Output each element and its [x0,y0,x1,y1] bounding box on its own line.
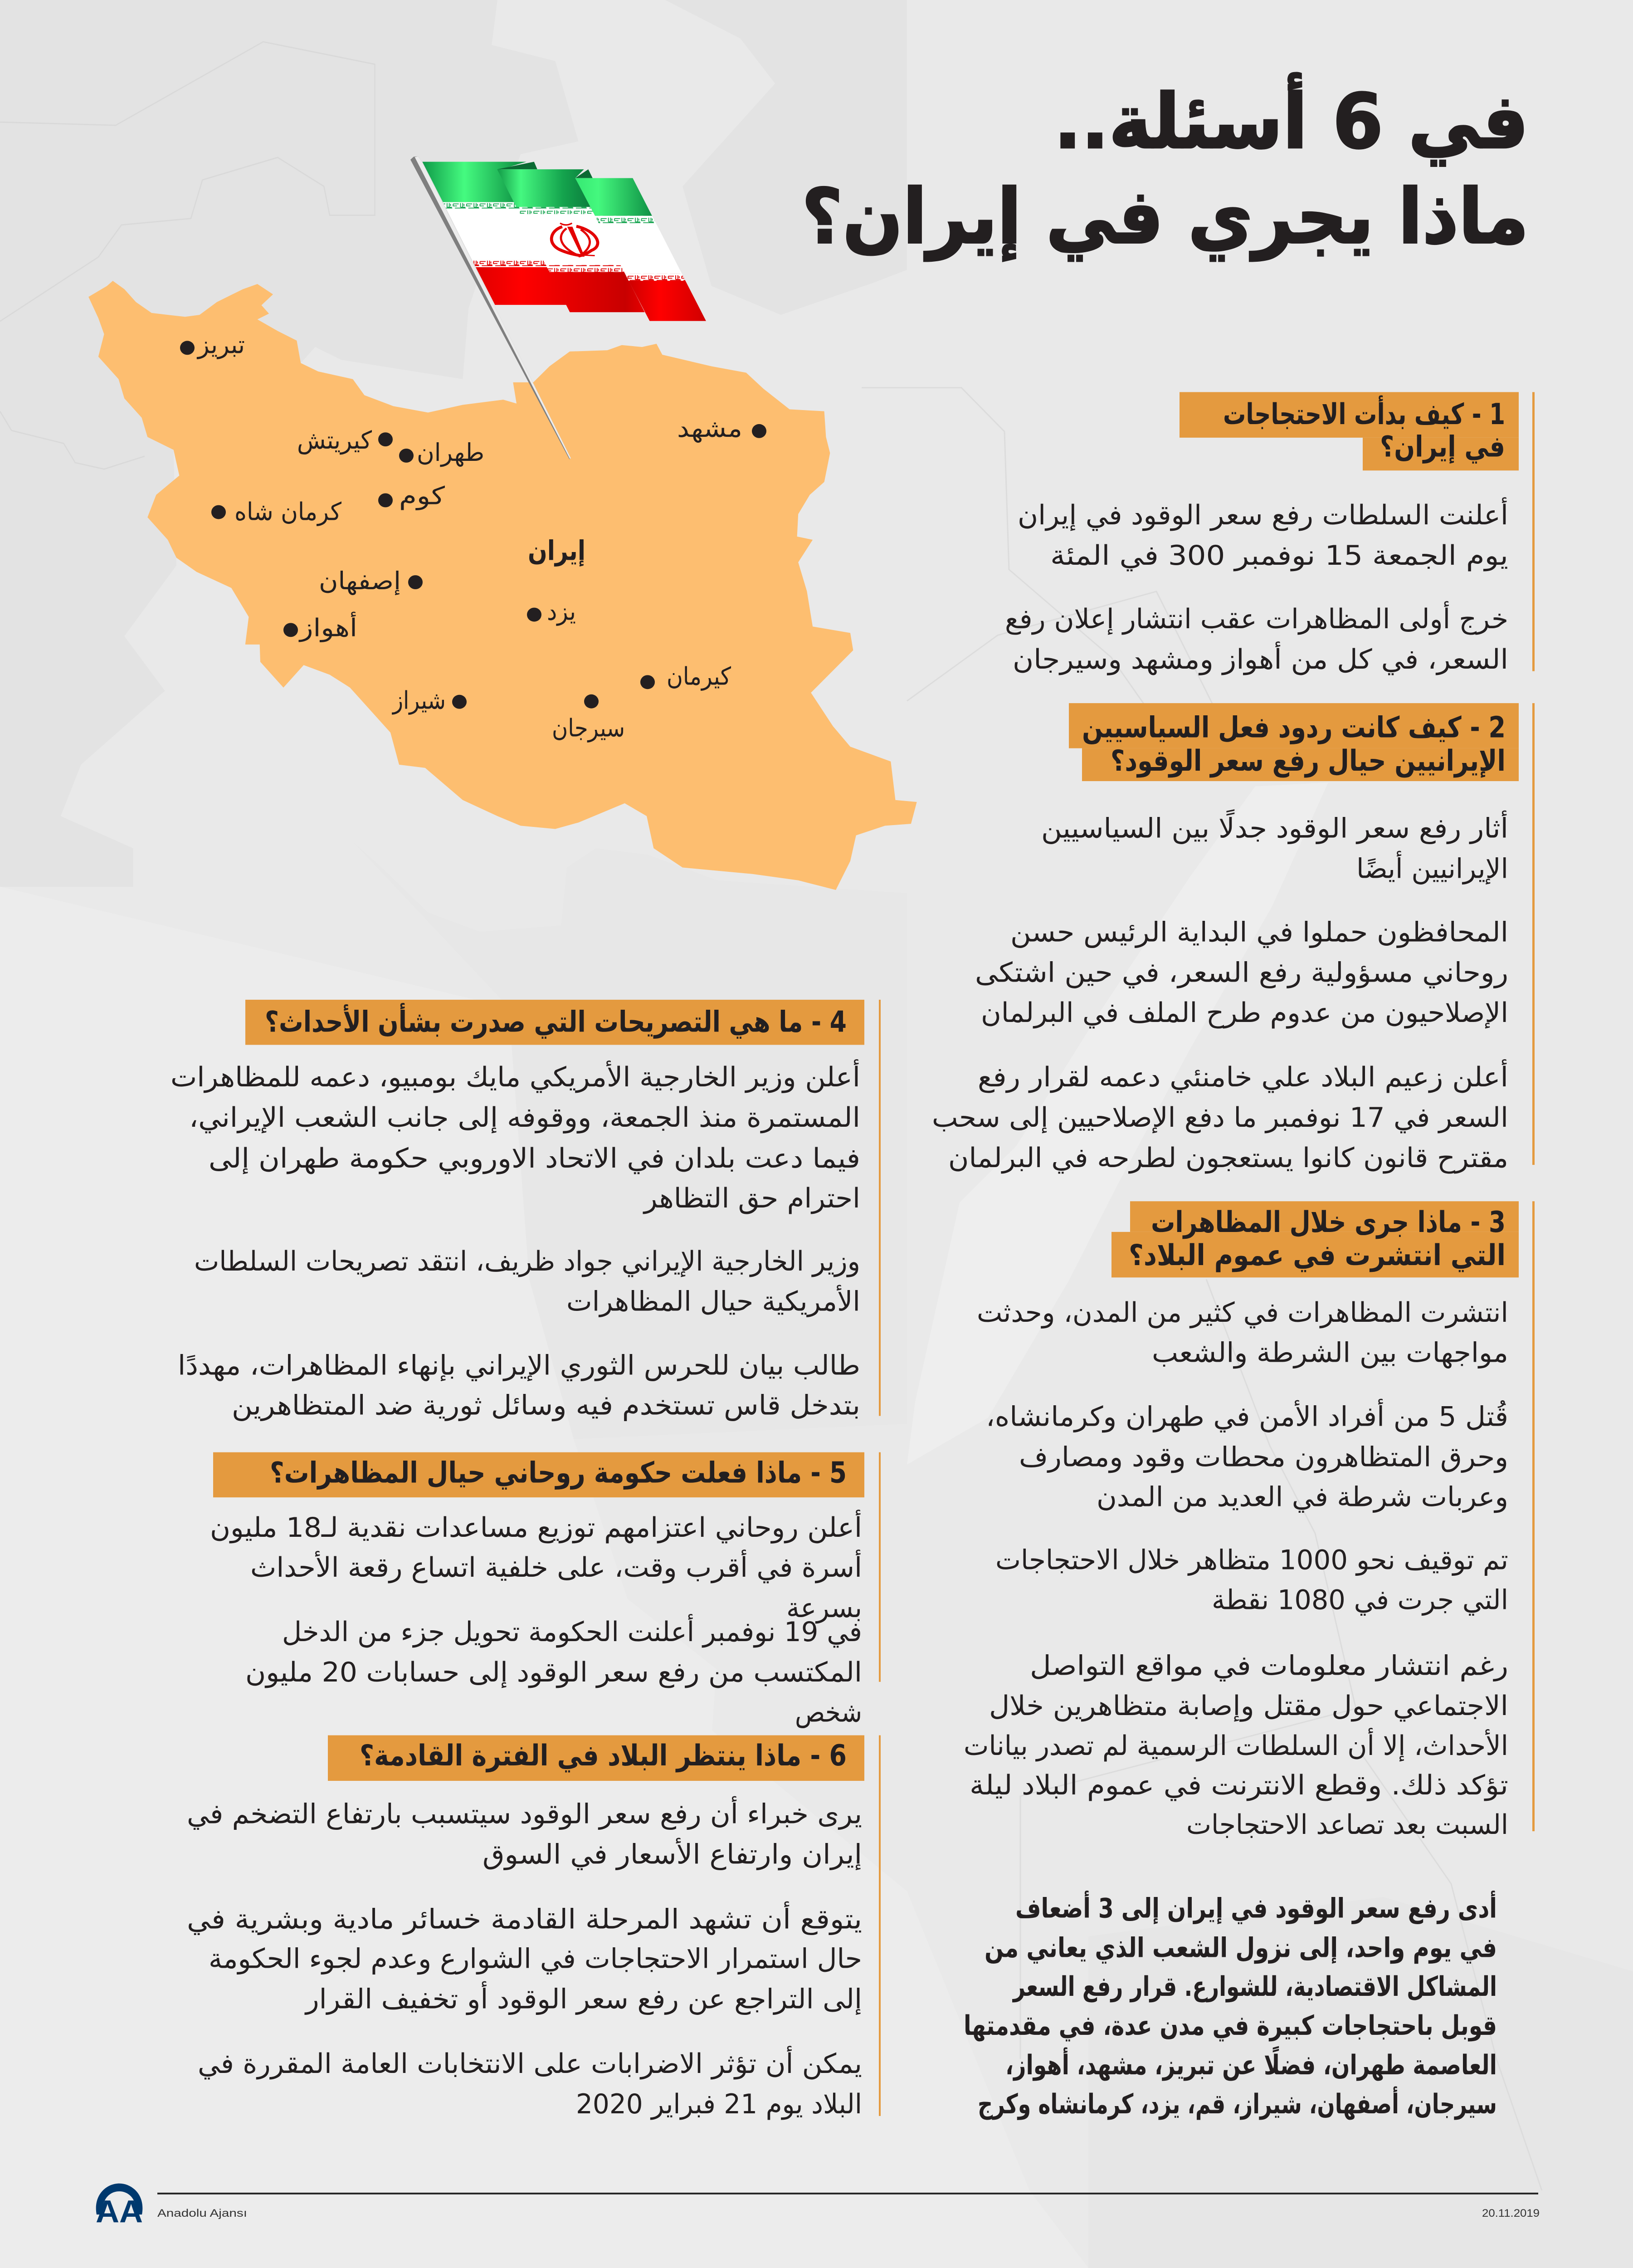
text block [210,1510,862,1624]
heading 6: 6 - ماذا ينتظر البلاد في الفترة القادمة؟ [360,1739,847,1773]
city: Yazd: يزد [547,597,576,626]
text block: وحرق المتظاهرون محطات وقود ومصارف [1019,1442,1508,1473]
text block: طالب بيان للحرس الثوري الإيراني بإنهاء المظاهرات، مهددًا [178,1350,860,1382]
title: في 6 أسئلة.. [1054,73,1529,166]
panel: section 5 [210,1452,881,1728]
heading 5 [213,1452,864,1497]
text block [1041,809,1508,885]
text block [171,1059,860,1214]
city labels [180,330,766,742]
heading 3 [1111,1201,1519,1277]
panel: section 1 [1005,392,1535,675]
city: Mashhad: مشهد [677,414,742,443]
text block: التي جرت في 1080 نقطة [1212,1584,1508,1616]
text block [187,1796,862,1871]
city: Kermanshah: كرمان شاه [234,497,342,526]
text block: وعربات شرطة في العديد من المدن [1097,1481,1508,1513]
city: Shiraz: شيراز [391,686,446,714]
text block: في 19 نوفمبر أعلنت الحكومة تحويل جزء من الدخل [282,1614,862,1648]
text block: الأحداث، إلا أن السلطات الرسمية لم تصدر بيانات [964,1728,1508,1762]
title [802,73,1529,261]
text block: أسرة في أقرب وقت، على خلفية اتساع رقعة الأحداث [250,1549,862,1584]
text block: تم توقيف نحو 1000 متظاهر خلال الاحتجاجات [995,1545,1508,1576]
panel: section 4 [171,1000,881,1421]
heading 5: 5 - ماذا فعلت حكومة روحاني حيال المظاهرات؟ [270,1456,847,1490]
country label: Iran: إيران [528,535,585,567]
accent line [1532,392,1535,671]
text block: خرج أولى المظاهرات عقب انتشار إعلان رفع [1005,601,1508,635]
city: Isfahan: إصفهان [319,567,401,596]
text block: أعلن وزير الخارجية الأمريكي مايك بومبيو، دعمه للمظاهرات [171,1059,860,1093]
city: Tabriz [180,330,245,359]
text block: الأمريكية حيال المظاهرات [566,1285,860,1317]
flag emblem [551,223,598,257]
city: Tehran: طهران [417,438,484,467]
text block [995,1545,1508,1616]
text block: أعلن زعيم البلاد علي خامنئي دعمه لقرار رفع [978,1059,1508,1093]
accent line [1532,703,1535,1165]
text block [245,1614,862,1728]
heading 1: 1 - كيف بدأت الاحتجاجات [1223,395,1505,431]
title: ماذا يجري في إيران؟ [802,173,1529,261]
heading 6 [328,1735,864,1781]
text block: احترام حق التظاهر [643,1183,860,1214]
text block [187,1901,862,2015]
heading 2: 2 - كيف كانت ردود فعل السياسيين [1082,711,1506,744]
text block [986,1399,1508,1513]
city: Sirjan: سيرجان [552,714,625,742]
city: Sirjan [552,694,625,742]
text block: مقترح قانون كانوا يستعجون لطرحه في البرلمان [948,1142,1508,1174]
text block: أثار رفع سعر الوقود جدلًا بين السياسيين [1041,809,1508,844]
text block [975,917,1508,1029]
text block [198,2046,862,2120]
icon: Anadolu Agency logo: AA [96,2194,143,2229]
accent line [1532,1201,1535,1831]
text block [932,1059,1508,1174]
heading 3: التي انتشرت في عموم البلاد؟ [1129,1239,1506,1272]
text block: السعر، في كل من أهواز ومشهد وسيرجان [1013,641,1508,675]
text block: فيما دعت بلدان في الاتحاد الاوروبي حكومة طهران إلى [209,1143,860,1175]
text block: البلاد يوم 21 فبراير 2020 [576,2088,862,2120]
text block: يرى خبراء أن رفع سعر الوقود سيتسبب بارتفاع التضخم في [187,1796,862,1830]
accent line [879,1000,881,1416]
text block: السبت بعد تصاعد الاحتجاجات [1186,1809,1508,1841]
text block: إيران وارتفاع الأسعار في السوق [483,1838,862,1871]
city: Qom: كوم [399,482,445,510]
footer [96,2184,1540,2229]
panel: section 2 [932,703,1535,1174]
text block: يوم الجمعة 15 نوفمبر 300 في المئة [1050,540,1508,572]
text block: أعلنت السلطات رفع سعر الوقود في إيران [1018,497,1508,532]
callout summary: أدى رفع سعر الوقود في إيران إلى 3 أضعاف [1015,1890,1497,1924]
text block: الاجتماعي حول مقتل وإصابة متظاهرين خلال [989,1690,1508,1722]
heading 1 [1180,392,1519,470]
text block: يمكن أن تؤثر الاضرابات على الانتخابات العامة المقررة في [198,2046,862,2080]
text block [1005,601,1508,675]
text block [194,1246,860,1317]
text block: أعلن روحاني اعتزامهم توزيع مساعدات نقدية لـ18 مليون [210,1510,862,1544]
city: Kerman [640,662,731,690]
text block: قُتل 5 من أفراد الأمن في طهران وكرمانشاه، [986,1399,1508,1432]
text block [964,1650,1508,1841]
heading 4: 4 - ما هي التصريحات التي صدرت بشأن الأحداث؟ [265,1003,847,1039]
city: Qom [378,482,445,510]
city: Tabriz: تبريز [196,330,245,359]
text block [178,1350,860,1421]
heading 2 [1069,703,1519,781]
text block: شخص [795,1697,862,1728]
text block: المكتسب من رفع سعر الوقود إلى حسابات 20 مليون [245,1657,862,1688]
flag of Iran [410,156,706,459]
accent line [879,1735,881,2116]
text block: رغم انتشار معلومات في مواقع التواصل [1030,1650,1508,1681]
city: Karaj: كيريتش [297,426,372,455]
city: Ahvaz [283,611,357,642]
map of Iran [88,281,917,890]
text block: يتوقع أن تشهد المرحلة القادمة خسائر مادية وبشرية في [187,1901,862,1935]
callout summary: في يوم واحد، إلى نزول الشعب الذي يعاني من [985,1932,1497,1964]
text block [977,1297,1508,1369]
text block: الإيرانيين أيضًا [1356,851,1508,885]
text block: مواجهات بين الشرطة والشعب [1152,1337,1508,1369]
text block: المحافظون حملوا في البداية الرئيس حسن [1010,917,1508,948]
text block: انتشرت المظاهرات في كثير من المدن، وحدثت [977,1297,1508,1329]
text block: الإصلاحيون من عدوم طرح الملف في البرلمان [981,997,1508,1029]
text block: بتدخل قاس تستخدم فيه وسائل ثورية ضد المتظاهرين [232,1390,860,1421]
accent line [879,1452,881,1682]
flag pole [410,156,571,459]
callout summary: العاصمة طهران، فضلًا عن تبريز، مشهد، أهواز، [1005,2046,1497,2081]
text block: روحاني مسؤولية رفع السعر، في حين اشتكى [975,957,1508,988]
city: Ahvaz: أهواز [298,611,357,642]
callout summary: قوبل باحتجاجات كبيرة في مدن عدة، في مقدمتها [964,2010,1497,2042]
text block: تؤكد ذلك. وقطع الانترنت في عموم البلاد ليلة [970,1769,1508,1801]
text block: بسرعة [786,1592,862,1624]
city: Mashhad [677,414,766,443]
text block: إلى التراجع عن رفع سعر الوقود أو تخفيف القرار [304,1981,862,2015]
panel: section 3 [964,1201,1535,1841]
agency name: Anadolu Ajansı [157,2207,247,2219]
text block: السعر في 17 نوفمبر ما دفع الإصلاحيين إلى سحب [932,1102,1508,1134]
panel: section 6 [187,1735,881,2120]
text block: المستمرة منذ الجمعة، ووقوفه إلى جانب الشعب الإيراني، [189,1102,860,1134]
date: 20.11.2019 [1482,2207,1540,2219]
heading 1: في إيران؟ [1380,430,1505,464]
text block: وزير الخارجية الإيراني جواد ظريف، انتقد تصريحات السلطات [194,1246,860,1278]
callout summary [964,1890,1497,2120]
text block [1018,497,1508,572]
text block: حال استمرار الاحتجاجات في الشوارع وعدم لجوء الحكومة [209,1943,862,1975]
heading 3: 3 - ماذا جرى خلال المظاهرات [1151,1206,1506,1239]
city: Yazd [527,597,576,626]
city: Kerman: كيرمان [667,662,731,690]
heading 4 [245,1000,864,1045]
heading 2: الإيرانيين حيال رفع سعر الوقود؟ [1111,744,1506,778]
